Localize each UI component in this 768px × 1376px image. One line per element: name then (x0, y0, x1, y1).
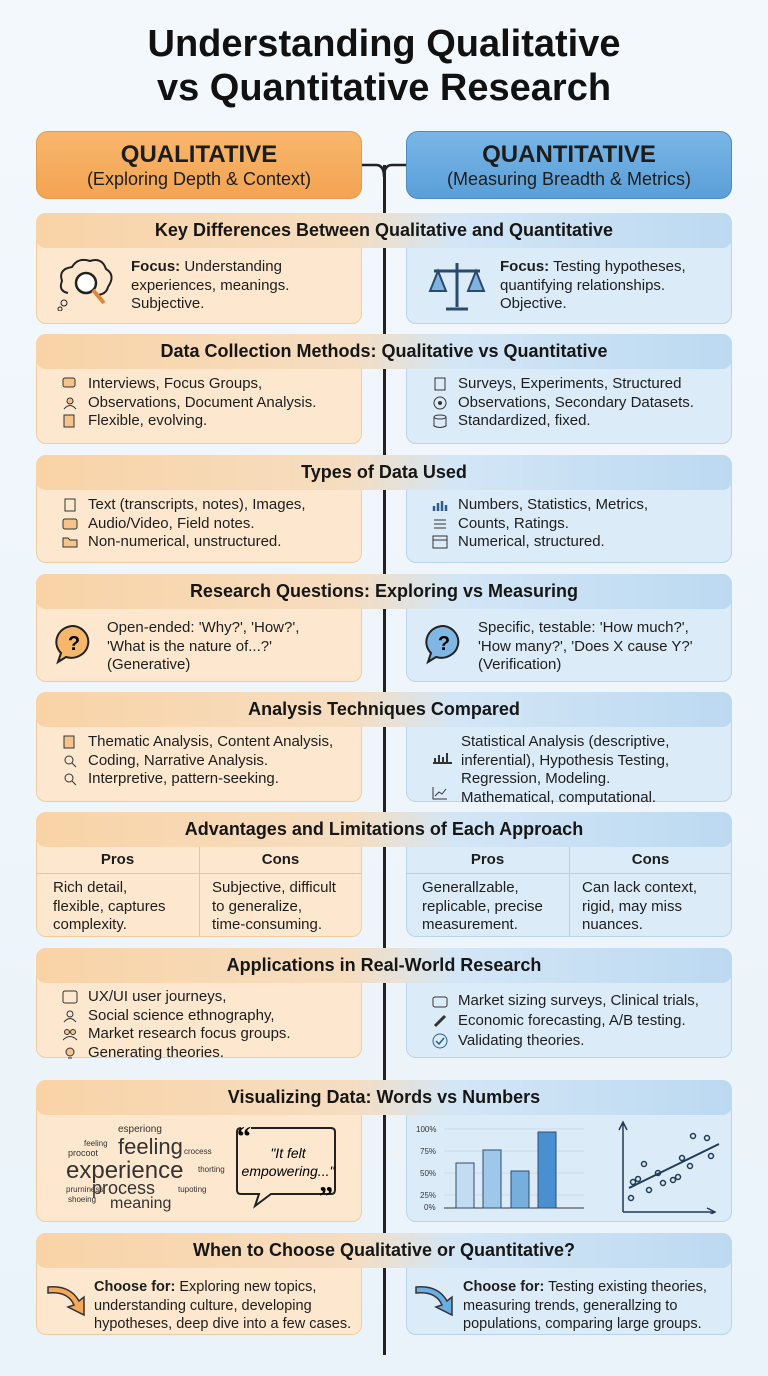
text: quantitative methods (434, 375, 694, 429)
text: qualitative analysis (64, 733, 333, 787)
panel: research questions (36, 574, 732, 682)
text: qualitative analysis: Thematic Analysis, Content Analysis, (88, 733, 333, 750)
text: qualitative methods: Flexible, evolving. (88, 412, 207, 429)
bar chart: 100% (416, 1125, 436, 1134)
heading: Research Questions: Exploring vs Measuring (190, 581, 578, 601)
title: Understanding Qualitative (148, 23, 620, 65)
word cloud: meaning (110, 1195, 171, 1212)
text: qualitative applications: Generating theories. (88, 1044, 224, 1060)
text: qualitative questions (107, 619, 299, 673)
table: qualitative pros/cons: to generalize, (212, 898, 302, 914)
title (148, 23, 620, 109)
text: quantitative analysis: Statistical Analysis (descriptive, (461, 733, 669, 750)
text: qualitative data: Text (transcripts, notes), Images, (88, 496, 306, 513)
header: qualitative: (Exploring Depth & Context) (87, 169, 311, 189)
panel: key differences (36, 213, 732, 324)
header: qualitative: QUALITATIVE (121, 141, 277, 168)
word cloud: procoot (68, 1148, 99, 1158)
icon: question bubble blue: ? (438, 633, 450, 655)
text: quantitative focus: quantifying relationships. (500, 276, 665, 294)
text: qualitative focus (131, 258, 289, 312)
heading (36, 213, 732, 248)
text: quantitative questions: Specific, testable: 'How much?', (478, 619, 689, 636)
text: qualitative analysis: Interpretive, pattern-seeking. (88, 770, 279, 787)
text: quantitative applications: Market sizing surveys, Clinical trials, (458, 992, 699, 1009)
text: quantitative questions: 'How many?', 'Does X cause Y?' (478, 638, 693, 654)
heading: Advantages and Limitations of Each Approach (185, 819, 583, 839)
text: choose quantitative: measuring trends, generallzing to (463, 1298, 677, 1314)
text: quantitative data: Numbers, Statistics, Metrics, (458, 496, 648, 513)
text: choose quantitative (463, 1279, 707, 1332)
text: quantitative applications: Validating theories. (458, 1032, 584, 1049)
text: qualitative methods (62, 375, 316, 429)
icon: bar chart small (433, 753, 452, 764)
connector (362, 164, 406, 177)
header: quantitative: (Measuring Breadth & Metrics) (447, 169, 691, 189)
heading: Types of Data Used (301, 462, 467, 482)
title: vs Quantitative Research (157, 67, 611, 109)
table: quantitative pros/cons (407, 847, 731, 936)
text: qualitative applications: UX/UI user journeys, (88, 988, 226, 1005)
table: qualitative pros/cons: flexible, captures (53, 898, 166, 914)
word cloud: shoeing (68, 1195, 96, 1204)
text: quantitative focus: Objective. (500, 295, 567, 312)
table: quantitative pros/cons: Cons (632, 851, 669, 868)
table: qualitative pros/cons: time-consuming. (212, 916, 322, 933)
table: qualitative pros/cons: Pros (101, 851, 134, 868)
icon: orange arrow (47, 1286, 85, 1316)
bar chart (416, 1125, 584, 1212)
header: qualitative (36, 131, 362, 199)
word cloud: tupoting (178, 1185, 206, 1194)
panel: when to choose (36, 1233, 732, 1335)
text: quantitative analysis: inferential), Hypothesis Testing, (461, 752, 669, 768)
table: qualitative pros/cons: complexity. (53, 916, 127, 933)
text: choose qualitative: hypotheses, deep dive into a few cases. (94, 1316, 351, 1332)
text: quantitative focus: Focus: Testing hypotheses, (500, 258, 686, 275)
heading: Analysis Techniques Compared (248, 699, 520, 719)
icon: question bubble blue (425, 625, 460, 664)
table: quantitative pros/cons: rigid, may miss (582, 898, 682, 914)
text: quantitative methods: Observations, Secondary Datasets. (458, 394, 694, 410)
text: qualitative methods: Interviews, Focus Groups, (88, 375, 262, 392)
text: qualitative applications: Market research focus groups. (88, 1025, 291, 1042)
word cloud: esperiong (118, 1124, 162, 1135)
heading (36, 334, 732, 369)
table: quantitative pros/cons: replicable, precise (422, 898, 543, 914)
panel: visualizing data (36, 1080, 732, 1222)
text: choose quantitative: Choose for: Testing existing theories, (463, 1279, 707, 1295)
table: qualitative pros/cons: Subjective, difficult (212, 879, 336, 896)
table: qualitative pros/cons: Rich detail, (53, 879, 127, 896)
heading: Key Differences Between Qualitative and Quantitative (155, 220, 613, 240)
word cloud: crocess (184, 1147, 212, 1156)
quote bubble: "It felt (270, 1145, 307, 1161)
text: qualitative questions: 'What is the nature of...?' (107, 638, 272, 654)
header: quantitative: QUANTITATIVE (482, 141, 656, 168)
heading (36, 1233, 732, 1268)
quote bubble: empowering..." (242, 1163, 335, 1179)
heading (36, 455, 732, 490)
panel: applications (36, 948, 732, 1060)
table: quantitative pros/cons: Can lack context, (582, 879, 697, 896)
heading: Visualizing Data: Words vs Numbers (228, 1087, 540, 1107)
table: qualitative pros/cons (36, 847, 362, 937)
text: qualitative analysis: Coding, Narrative Analysis. (88, 752, 268, 768)
text: qualitative applications: Social science ethnography, (88, 1006, 275, 1024)
table: quantitative pros/cons: measurement. (422, 916, 518, 933)
text: choose qualitative: understanding culture, developing (94, 1298, 312, 1314)
table: qualitative pros/cons: Cons (262, 851, 299, 868)
table: quantitative pros/cons: Pros (471, 851, 504, 868)
bar chart: 25% (420, 1191, 436, 1200)
text: qualitative data: Non-numerical, unstructured. (88, 533, 281, 550)
heading (36, 948, 732, 983)
text: choose qualitative: Choose for: Exploring new topics, (94, 1279, 316, 1295)
panel: advantages and limitations (36, 812, 732, 937)
icon: blue arrow (415, 1286, 453, 1316)
icon: scales (428, 263, 486, 310)
text: quantitative data: Numerical, structured. (458, 533, 605, 550)
word cloud: feeling (84, 1139, 108, 1148)
text: quantitative questions (478, 619, 693, 673)
word cloud: experience (66, 1157, 183, 1184)
text: quantitative applications: Economic forecasting, A/B testing. (458, 1012, 686, 1029)
text: quantitative data: Counts, Ratings. (458, 514, 569, 532)
icon: question bubble orange (55, 625, 90, 664)
text: quantitative applications (432, 992, 699, 1049)
quote bubble: “ (237, 1122, 251, 1153)
scatter plot (618, 1120, 720, 1214)
text: quantitative analysis: Mathematical, computational. (461, 788, 656, 806)
bar chart: 50% (420, 1169, 436, 1178)
word cloud (66, 1124, 225, 1212)
text: qualitative questions: (Generative) (107, 656, 190, 673)
icon: question bubble orange: ? (68, 633, 80, 655)
word cloud: process (92, 1178, 155, 1198)
bar chart: 0% (424, 1203, 436, 1212)
text: qualitative focus: Subjective. (131, 295, 204, 312)
text: choose qualitative (94, 1279, 351, 1332)
text: qualitative data (62, 496, 306, 550)
heading (36, 1080, 732, 1115)
panel: data collection (36, 334, 732, 444)
text: qualitative focus: Focus: Understanding (131, 258, 282, 275)
quote bubble: ” (319, 1182, 333, 1213)
text: quantitative methods: Standardized, fixed. (458, 412, 591, 429)
text: quantitative data (432, 496, 648, 550)
word cloud: thorting (198, 1165, 225, 1174)
word cloud: feeling (118, 1134, 183, 1159)
text: quantitative analysis: Regression, Modeling. (461, 770, 610, 787)
text: quantitative analysis (461, 733, 669, 806)
heading (36, 574, 732, 609)
heading: Applications in Real-World Research (227, 955, 541, 975)
heading: When to Choose Qualitative or Quantitative? (193, 1240, 575, 1260)
text: qualitative focus: experiences, meanings. (131, 276, 289, 294)
heading: Data Collection Methods: Qualitative vs Quantitative (160, 341, 608, 361)
icon: line chart small (432, 787, 447, 800)
heading (36, 812, 732, 847)
heading (36, 692, 732, 727)
text: quantitative methods: Surveys, Experiments, Structured (458, 375, 681, 392)
text: quantitative questions: (Verification) (478, 656, 561, 673)
table: quantitative pros/cons: nuances. (582, 916, 643, 933)
text: choose quantitative: populations, comparing large groups. (463, 1316, 702, 1332)
text: qualitative data: Audio/Video, Field notes. (88, 514, 255, 532)
bar chart: 75% (420, 1147, 436, 1156)
panel: analysis (36, 692, 732, 806)
text: qualitative applications (62, 988, 291, 1060)
text: quantitative focus (500, 258, 686, 312)
word cloud: prurniness (66, 1185, 103, 1194)
icon: magnifier cloud (58, 258, 112, 311)
quote bubble (236, 1122, 336, 1213)
panel: types of data (36, 455, 732, 563)
text: qualitative questions: Open-ended: 'Why?', 'How?', (107, 619, 299, 636)
text: qualitative methods: Observations, Document Analysis. (88, 394, 316, 410)
table: quantitative pros/cons: Generallzable, (422, 879, 519, 896)
center divider line (383, 165, 386, 1355)
header: quantitative (406, 131, 732, 199)
